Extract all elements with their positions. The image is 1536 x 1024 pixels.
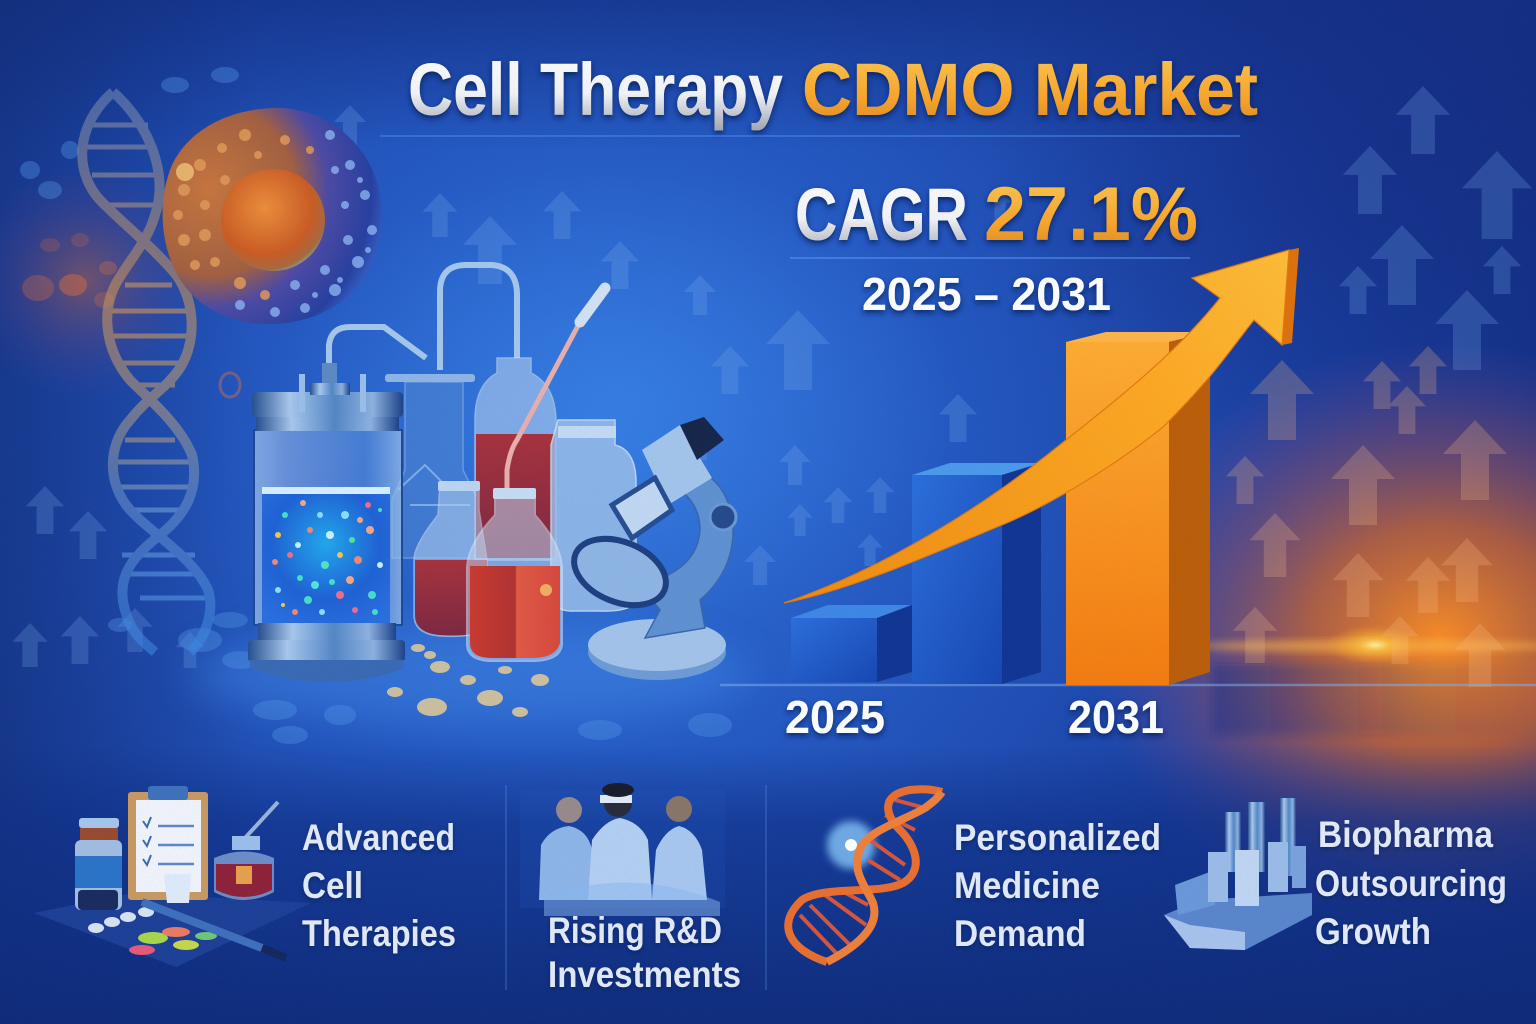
icon: medicines and clipboard — [34, 786, 311, 967]
microscope arm — [640, 470, 733, 638]
pills — [88, 907, 217, 955]
axis label 2031: 2031 — [1068, 691, 1164, 743]
label: rising R&D investments: Investments — [548, 954, 741, 995]
reactor glass body — [254, 430, 402, 625]
icon: biopharma factory — [1164, 798, 1312, 950]
pen — [142, 902, 262, 948]
title underline — [380, 135, 1240, 137]
CAGR period: 2025 – 2031 — [862, 268, 1111, 320]
driver: personalized medicine demand — [788, 789, 1161, 962]
title — [408, 48, 1258, 131]
connecting tubes — [329, 265, 517, 385]
reactor lid — [252, 392, 403, 417]
background up arrows pattern — [12, 86, 1532, 668]
helix strand two — [107, 92, 194, 652]
label: advanced cell therapies: Cell — [302, 865, 363, 906]
lab floor glow and droplets — [190, 625, 750, 725]
helix rungs — [86, 125, 205, 598]
bar 2025 — [791, 605, 912, 682]
driver: advanced cell therapies — [34, 786, 456, 967]
growth arrow — [784, 248, 1299, 603]
bar middle — [912, 463, 1041, 684]
label: rising R&D investments: Rising R&D — [548, 910, 722, 951]
cup — [164, 874, 191, 903]
CAGR value: 27.1% — [984, 172, 1198, 257]
axis label 2025: 2025 — [785, 691, 885, 743]
panel backdrop — [520, 790, 725, 908]
microscope eyepiece — [680, 417, 724, 460]
icon: red DNA strand — [788, 789, 942, 962]
cell illustration — [163, 108, 382, 324]
icon: three scientists — [539, 783, 720, 916]
bar 2031 — [1066, 332, 1210, 685]
medicine bottle — [75, 818, 122, 910]
cell nucleus — [221, 169, 325, 271]
microscope head — [642, 425, 712, 505]
cell membrane texture — [173, 129, 377, 317]
reactor cells — [272, 500, 383, 615]
label: personalized medicine demand: Demand — [954, 913, 1086, 954]
label: personalized medicine demand: Medicine — [954, 865, 1100, 906]
helix strand one — [82, 92, 210, 652]
title: Cell Therapy — [408, 48, 783, 131]
reactor base — [258, 623, 396, 641]
label: advanced cell therapies: Advanced — [302, 817, 455, 858]
bioreactor — [248, 363, 405, 682]
microscope knob — [710, 504, 736, 530]
chart baseline — [720, 684, 1536, 686]
driver: biopharma outsourcing growth — [1164, 798, 1507, 952]
microscope objective — [612, 478, 672, 538]
DNA helix background — [82, 92, 210, 652]
background scattered cell blobs — [20, 67, 732, 744]
label: personalized medicine demand: Personalized — [954, 817, 1161, 858]
background warm arrows — [1226, 346, 1507, 687]
jar — [214, 802, 278, 900]
glass bottle behind reactor — [385, 374, 478, 558]
CAGR value: CAGR — [795, 173, 968, 256]
pipette — [507, 288, 605, 490]
large red flask — [467, 488, 562, 661]
label: biopharma outsourcing growth: Growth — [1315, 911, 1431, 952]
label: advanced cell therapies: Therapies — [302, 913, 456, 954]
label: biopharma outsourcing growth: Biopharma — [1318, 814, 1493, 855]
microscope base — [588, 624, 726, 680]
CAGR rule — [790, 257, 1190, 259]
clipboard — [128, 786, 208, 900]
small erlenmeyer flask — [414, 481, 487, 636]
storage jug — [551, 420, 636, 611]
reactor liquid — [262, 490, 390, 623]
divider — [506, 785, 766, 990]
title: CDMO Market — [802, 48, 1258, 131]
bar chart — [791, 332, 1210, 685]
CAGR value — [795, 172, 1198, 257]
red media bottle — [475, 358, 556, 560]
driver: rising R&D investments — [520, 783, 741, 995]
microscope — [564, 417, 736, 680]
microscope stage — [564, 526, 676, 618]
label: biopharma outsourcing growth: Outsourcing — [1315, 863, 1507, 904]
